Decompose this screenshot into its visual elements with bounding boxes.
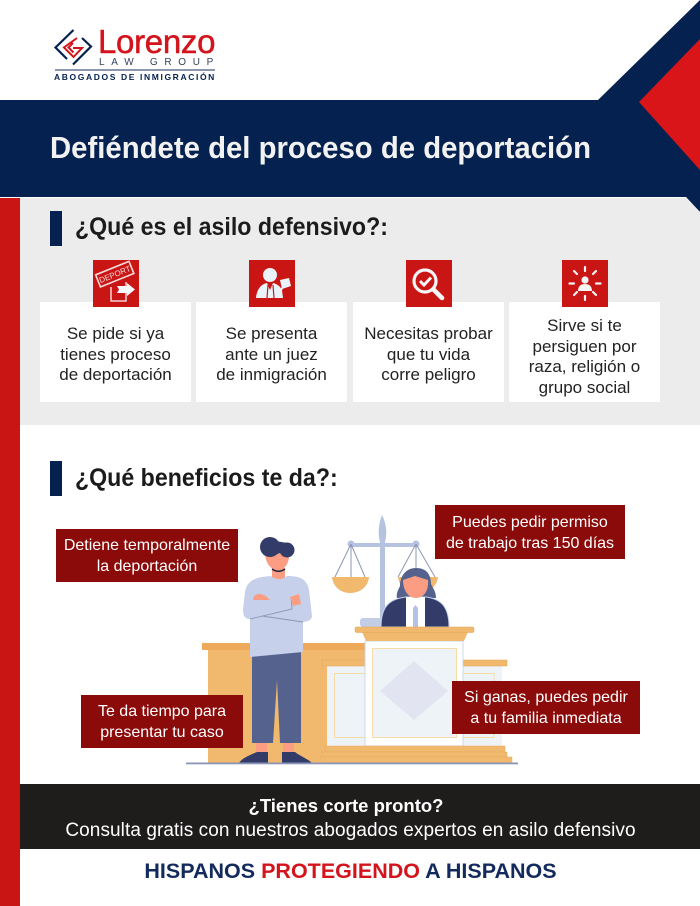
callout: tiempo: presentar tu caso bbox=[100, 724, 224, 740]
heading marker bbox=[50, 461, 62, 496]
heading: ¿Qué es el asilo defensivo?: bbox=[75, 213, 388, 241]
cta text: Consulta gratis con nuestros abogados expertos en asilo defensivo bbox=[65, 820, 636, 841]
icon: persecuted person bbox=[562, 260, 608, 307]
cta heading: ¿Tienes corte pronto? bbox=[249, 795, 443, 816]
call to action band bbox=[20, 784, 700, 849]
callout: permiso de trabajo: Puedes pedir permiso bbox=[452, 514, 608, 531]
logo rule bbox=[55, 69, 215, 70]
card text bbox=[530, 319, 640, 396]
card 1 bbox=[40, 260, 191, 402]
heading marker bbox=[50, 211, 62, 246]
scales bbox=[332, 515, 438, 627]
callout: tiempo bbox=[81, 695, 243, 748]
panel: qué es el asilo defensivo bbox=[20, 198, 700, 425]
card text: Sirve si te bbox=[547, 316, 622, 335]
side benches bbox=[322, 660, 507, 746]
card text bbox=[217, 328, 326, 384]
card text: persiguen por bbox=[533, 336, 636, 356]
card 3 bbox=[353, 260, 504, 402]
card text: Necesitas probar bbox=[364, 324, 493, 343]
logo bbox=[54, 23, 220, 82]
slogan: HISPANOS PROTEGIENDO A HISPANOS bbox=[144, 859, 557, 883]
icon: magnifier with check bbox=[406, 260, 452, 307]
callout: detiene: Detiene temporalmente bbox=[64, 537, 230, 554]
card text: tienes proceso bbox=[60, 344, 171, 364]
callout: tiempo: Te da tiempo para bbox=[98, 703, 226, 720]
card text: de inmigración bbox=[216, 365, 327, 384]
heading: ¿Qué beneficios te da?: bbox=[75, 464, 338, 492]
back desk bbox=[202, 643, 368, 763]
central bench bbox=[355, 627, 474, 746]
title: Defiéndete del proceso de deportación bbox=[50, 130, 591, 165]
panel: beneficios bbox=[20, 425, 700, 784]
callout: familia: Si ganas, puedes pedir bbox=[464, 689, 628, 706]
card text: raza, religión o bbox=[529, 357, 640, 376]
header band bbox=[0, 0, 700, 212]
bench steps bbox=[320, 746, 512, 763]
callout: familia bbox=[452, 681, 640, 734]
card text: Se pide si ya bbox=[67, 324, 164, 343]
callout: permiso de trabajo bbox=[435, 505, 625, 559]
logo name: Lorenzo bbox=[98, 23, 215, 60]
card text: ante un juez bbox=[225, 344, 318, 364]
card text bbox=[60, 327, 171, 384]
card text bbox=[366, 327, 492, 384]
card text: grupo social bbox=[539, 378, 630, 396]
callout: detiene bbox=[56, 529, 238, 582]
logo tagline: ABOGADOS DE INMIGRACIÓN bbox=[54, 72, 216, 82]
icon: deport document bbox=[93, 260, 139, 307]
card 2 bbox=[196, 260, 347, 402]
card text: corre peligro bbox=[381, 365, 476, 384]
man bbox=[239, 537, 312, 763]
logo icon bbox=[54, 29, 92, 66]
judge bbox=[381, 568, 449, 627]
ground line bbox=[186, 762, 518, 764]
card 4 bbox=[509, 260, 660, 402]
card text: Se presenta bbox=[226, 324, 317, 343]
callout: familia: a tu familia inmediata bbox=[470, 710, 622, 726]
red side strip bbox=[0, 198, 20, 906]
callout: permiso de trabajo: de trabajo tras 150 días bbox=[446, 534, 614, 552]
card text: que tu vida bbox=[387, 344, 470, 364]
logo subtitle: LAW GROUP bbox=[99, 57, 220, 68]
card text: de deportación bbox=[59, 365, 172, 384]
icon: deport document: DEPORT bbox=[98, 264, 132, 285]
callout: detiene: la deportación bbox=[97, 558, 197, 574]
icon: judge with gavel bbox=[249, 260, 295, 307]
